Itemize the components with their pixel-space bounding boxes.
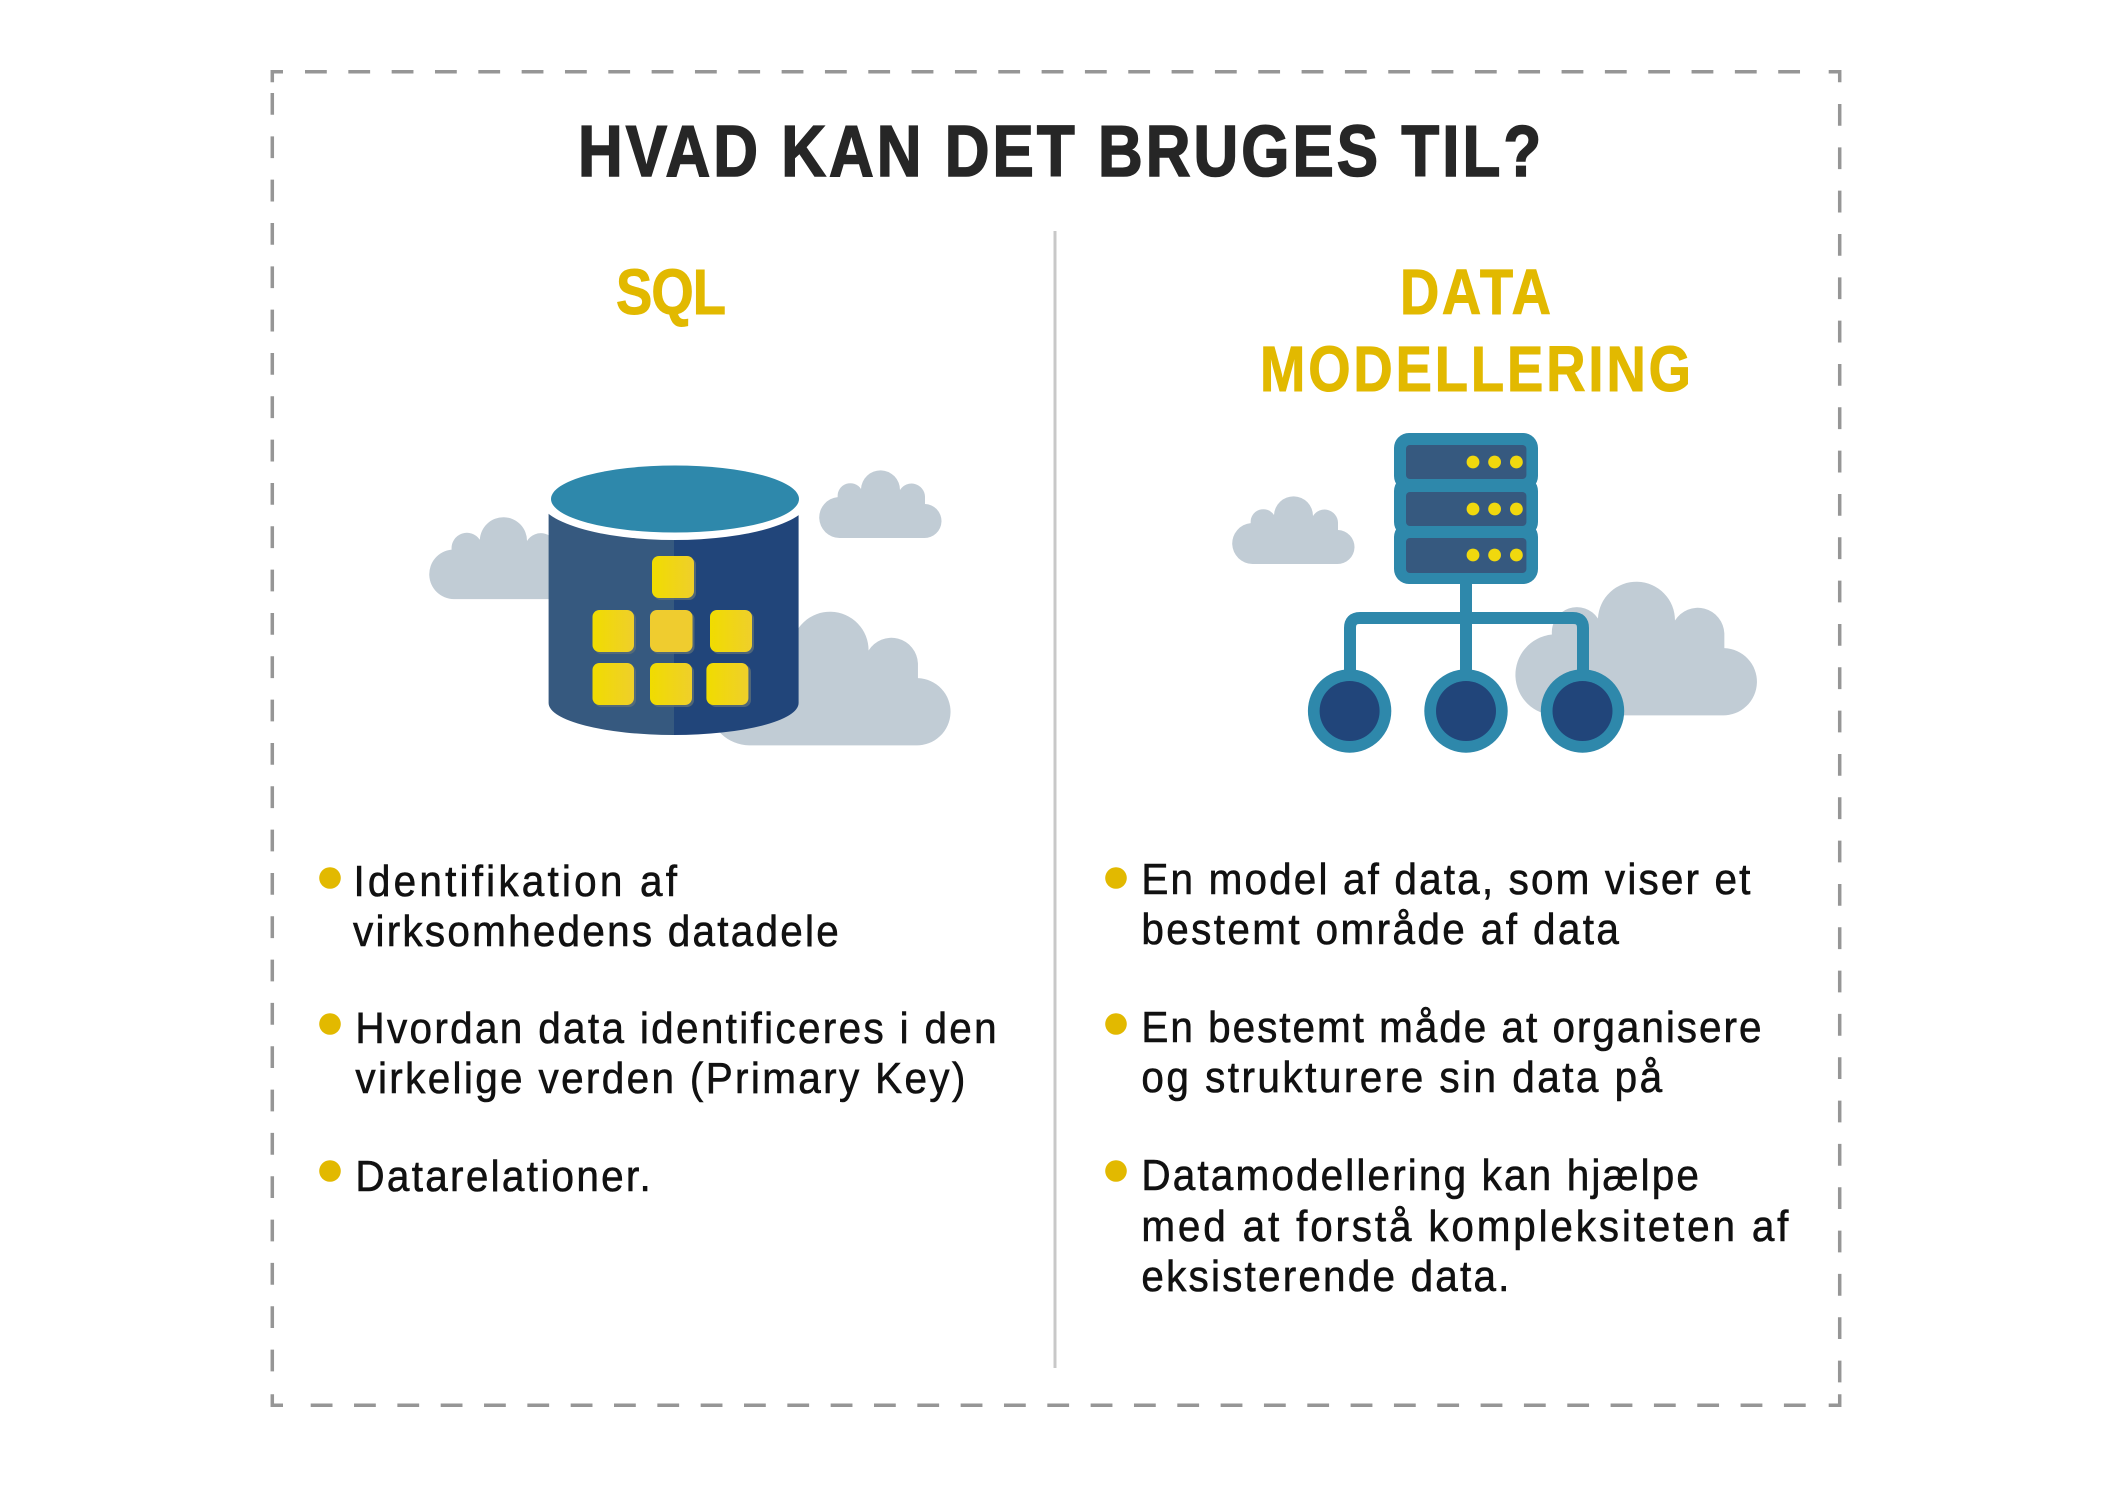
dashed frame [272, 72, 1840, 1405]
heading: SQL: SQL [616, 256, 726, 328]
bullet list: Data modellering: En bestemt måde at organisere [1141, 1002, 1761, 1051]
bullet list: SQL: Hvordan data identificeres i den [355, 1003, 997, 1052]
bullet list: Data modellering: med at forstå kompleksiteten af [1141, 1201, 1789, 1250]
icon: database with clouds [429, 458, 951, 745]
heading: Data modellering [1260, 256, 1691, 405]
bullet list: Data modellering [1105, 854, 1789, 1300]
panel: SQL [319, 256, 997, 1200]
heading: Data modellering: DATA [1400, 256, 1551, 328]
bullet list: Data modellering: eksisterende data. [1141, 1251, 1509, 1300]
panel: Data modellering [1105, 256, 1789, 1300]
bullet list: Data modellering: Datamodellering kan hjælpe [1141, 1150, 1699, 1199]
bullet list: Data modellering: En model af data, som viser et [1141, 854, 1751, 903]
bullet list: SQL: virkelige verden (Primary Key) [355, 1053, 965, 1102]
bullet list: SQL: Identifikation af [354, 856, 677, 905]
bullet list: SQL: Datarelationer. [355, 1151, 651, 1200]
bullet list: Data modellering: og strukturere sin data på [1141, 1052, 1663, 1101]
heading: Data modellering: MODELLERING [1260, 333, 1691, 405]
bullet list: SQL: virksomhedens datadele [353, 906, 839, 955]
center divider [1054, 231, 1056, 1368]
bullet list: Data modellering: bestemt område af data [1141, 904, 1619, 953]
bullet list: SQL [319, 856, 997, 1200]
title: HVAD KAN DET BRUGES TIL? [578, 112, 1541, 192]
icon: server network with clouds [1232, 433, 1757, 753]
